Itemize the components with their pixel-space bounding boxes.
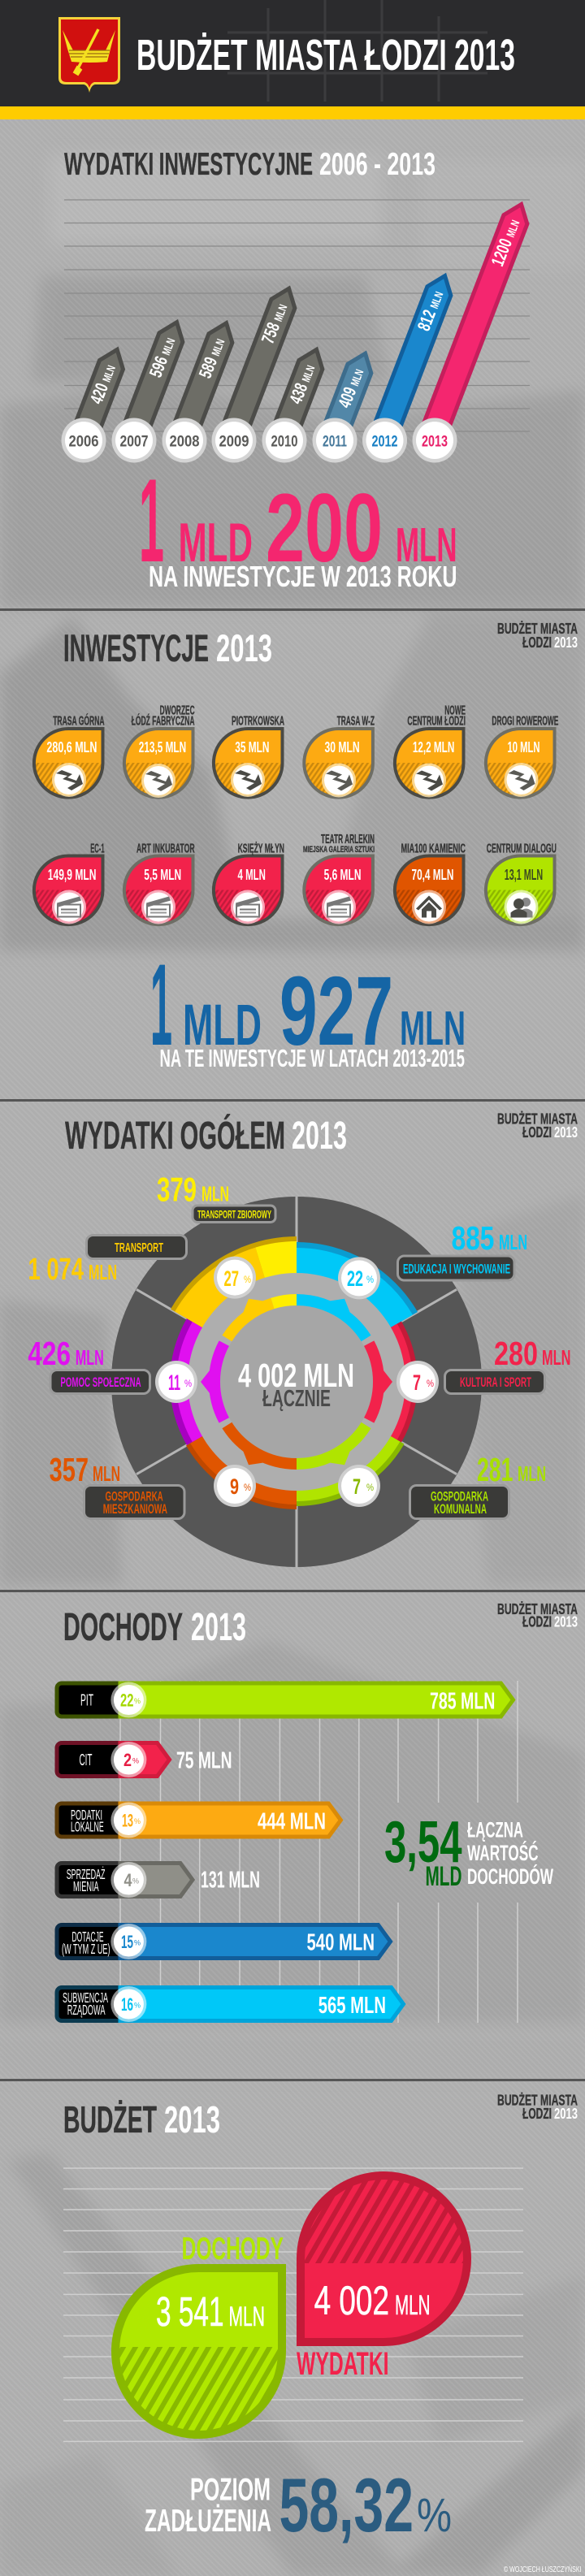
label: transport <box>28 1235 187 1287</box>
callout: poziom zadłużenia 58,32%: ZADŁUŻENIA <box>145 2504 271 2539</box>
percent markers <box>155 1257 439 1507</box>
percent markers: % <box>366 1482 374 1493</box>
year markers: 2012 <box>372 434 398 450</box>
segment: pomoc społeczna <box>170 1318 297 1445</box>
label: gospodarka mieszkaniowa: MIESZKANIOWA <box>103 1502 167 1517</box>
brand tag <box>497 2092 578 2122</box>
drop: wydatki <box>297 2172 467 2382</box>
callout: 3,54 mld total income: 3,54 <box>384 1810 462 1875</box>
heading: wydatki ogółem 2013: 2013 <box>292 1115 347 1158</box>
percent markers: % <box>427 1378 434 1389</box>
badge: Mia100 Kamienic <box>395 842 466 924</box>
badge: Art Inkubator: ART INKUBATOR <box>136 842 195 856</box>
badge: Mia100 Kamienic: 70,4 MLN <box>411 866 453 883</box>
bar: subwencja rządowa: % <box>134 2002 141 2010</box>
header band <box>0 0 585 119</box>
badge: Trasa Górna <box>34 712 105 798</box>
bar: PIT: 785 MLN <box>430 1688 495 1714</box>
brand tag: ŁODZI <box>522 634 552 651</box>
label: transport zbiorowy: 379 <box>157 1170 197 1209</box>
arrow 2009: 758 MLN <box>258 301 291 346</box>
year markers: 2013 <box>422 434 448 450</box>
arrow 2007 <box>124 318 188 433</box>
badge: Trasa W-Z <box>304 714 375 798</box>
badge: Trasa W-Z: 30 MLN <box>324 738 360 755</box>
year markers: 2006 <box>68 434 99 450</box>
badge: Drogi rowerowe <box>486 714 558 798</box>
badge: Drogi rowerowe: 10 MLN <box>507 738 540 755</box>
segment: edukacja <box>297 1242 418 1382</box>
drop: wydatki: MLN <box>395 2290 431 2321</box>
bar: PIT: % <box>134 1697 141 1705</box>
badge: EC-1 <box>34 842 105 924</box>
big number: 1 mld 927 mln <box>150 941 466 1070</box>
label: gospodarka mieszkaniowa: 357 <box>50 1451 89 1488</box>
label: pomoc społeczna: 426 <box>28 1335 71 1372</box>
heading: budżet 2013: BUDŻET <box>63 2098 157 2141</box>
badge: Księży Młyn: 4 MLN <box>237 866 266 883</box>
bar: sprzedaż mienia: % <box>132 1877 139 1885</box>
bar: dotacje: (W TYM Z UE) <box>62 1941 110 1957</box>
bar: PIT: PIT <box>80 1691 93 1709</box>
bar: PIT: 22 <box>120 1690 133 1711</box>
arrow 2006 <box>75 345 129 433</box>
badge: EC-1: 149,9 MLN <box>48 866 96 883</box>
heading: dochody 2013: 2013 <box>191 1606 246 1649</box>
badge: Trasa Górna: 280,6 MLN <box>46 738 97 755</box>
bar: sprzedaż mienia: 4 <box>124 1870 132 1890</box>
heading: dochody 2013: DOCHODY <box>63 1606 183 1649</box>
big number: 1 mld 200 mln: MLD <box>179 512 253 574</box>
percent markers: 7 <box>353 1474 361 1499</box>
label: gospodarka mieszkaniowa: MLN <box>93 1461 120 1486</box>
badge: Dworzec Łódź Fabryczna <box>124 704 195 798</box>
bar: podatki lokalne: 13 <box>122 1810 133 1831</box>
label: edukacja i wychowanie: 885 <box>452 1219 494 1257</box>
segment: mieszkaniowa <box>186 1382 297 1509</box>
percent markers: % <box>366 1274 374 1285</box>
badge: Księży Młyn <box>214 842 284 924</box>
arrow 2011: 409 MLN <box>334 366 367 410</box>
bar: subwencja rządowa: 16 <box>121 1994 133 2015</box>
label: transport zbiorowy: MLN <box>202 1181 229 1206</box>
chart: investment spending arrows 2006-2013 <box>62 200 533 463</box>
arrow 2010 <box>275 345 328 433</box>
badge: Centrum Dialogu <box>486 842 557 924</box>
drop: dochody: DOCHODY <box>182 2232 284 2266</box>
bar: dotacje: % <box>134 1938 141 1946</box>
label: gospodarka komunalna: MLN <box>518 1461 546 1486</box>
big number: 1 mld 927 mln: MLD <box>183 994 262 1058</box>
label: kultura i sport: KULTURA I SPORT <box>460 1375 531 1390</box>
arrow 2009 <box>223 284 301 434</box>
badge: Piotrkowska: PIOTRKOWSKA <box>232 714 284 728</box>
center total: ŁĄCZNIE <box>262 1386 331 1412</box>
bar: subwencja rządowa: 565 MLN <box>318 1993 386 2019</box>
arrow 2010: 438 MLN <box>285 362 318 407</box>
callout: poziom zadłużenia 58,32%: POZIOM <box>190 2473 271 2507</box>
label: gospodarka komunalna: GOSPODARKA <box>431 1490 488 1504</box>
label: gospodarka komunalna: KOMUNALNA <box>434 1502 487 1517</box>
bar: subwencja rządowa: RZĄDOWA <box>67 2002 106 2018</box>
bar: sprzedaż mienia: SPRZEDAŻ <box>67 1866 106 1882</box>
big number: 1 mld 200 mln: 200 <box>266 474 383 582</box>
label: transport zbiorowy: TRANSPORT ZBIOROWY <box>197 1209 271 1220</box>
percent markers: 27 <box>224 1266 239 1291</box>
brand tag: ŁODZI <box>522 1613 552 1630</box>
percent markers: 9 <box>230 1474 239 1499</box>
bar: dotacje: 540 MLN <box>307 1930 375 1956</box>
drop: wydatki: WYDATKI <box>297 2346 388 2382</box>
badge: Centrum Dialogu: 13,1 MLN <box>505 866 543 883</box>
arrow 2013: 1200 MLN <box>487 216 523 269</box>
bar: podatki lokalne: % <box>134 1817 141 1825</box>
chart: spending radial pie <box>111 1197 482 1567</box>
drop: dochody: MLN <box>229 2301 265 2332</box>
bar: podatki lokalne: 444 MLN <box>258 1809 326 1835</box>
badge: Teatr Arlekin / Miejska Galeria Sztuki: 5,6 MLN <box>324 866 361 883</box>
big number: 1 mld 200 mln <box>139 454 457 587</box>
year markers <box>62 418 457 463</box>
label: kultura i sport <box>445 1335 570 1394</box>
badges: investments <box>34 704 558 924</box>
badge: Dworzec Łódź Fabryczna: DWORZEC <box>160 704 195 718</box>
label: gospodarka mieszkaniowa: GOSPODARKA <box>106 1490 163 1504</box>
label: transport: TRANSPORT <box>115 1241 163 1255</box>
badge: Księży Młyn: KSIĘŻY MŁYN <box>238 842 284 856</box>
badge: Dworzec Łódź Fabryczna: ŁÓDŹ FABRYCZNA <box>132 712 195 728</box>
label: gospodarka komunalna <box>410 1451 546 1519</box>
bar: PIT <box>57 1682 514 1717</box>
drop: dochody <box>115 2232 284 2435</box>
inner ring <box>214 1300 379 1464</box>
arrow 2013 <box>423 200 533 433</box>
bar: sprzedaż mienia: MIENIA <box>73 1878 99 1894</box>
badge: Nowe Centrum Łodzi: NOWE <box>444 704 466 718</box>
big number: 1 mld 200 mln: MLN <box>396 518 457 572</box>
label: transport: 1 074 <box>28 1253 84 1287</box>
brand tag <box>497 1110 578 1141</box>
big number: 1 mld 200 mln: 1 <box>139 454 164 587</box>
badge: Nowe Centrum Łodzi <box>395 704 466 798</box>
badge: Nowe Centrum Łodzi: CENTRUM ŁODZI <box>407 714 466 728</box>
percent markers: 11 <box>168 1370 180 1395</box>
badge: Teatr Arlekin / Miejska Galeria Sztuki: TEATR ARLEKIN <box>321 833 375 846</box>
year markers: 2011 <box>323 434 347 450</box>
heading: budżet 2013: 2013 <box>164 2098 220 2141</box>
icon: coat of arms of Łódź <box>58 17 120 93</box>
heading: wydatki inwestycyjne: WYDATKI INWESTYCYJNE <box>64 147 313 182</box>
badge: Trasa W-Z: TRASA W-Z <box>337 714 375 728</box>
year markers: 2007 <box>120 434 148 450</box>
arrow 2008: 589 MLN <box>195 335 228 381</box>
label: gospodarka komunalna: 281 <box>477 1451 513 1488</box>
arrow 2007: 596 MLN <box>145 334 179 380</box>
callout: 3,54 mld total income: MLD <box>426 1861 462 1892</box>
big number: 1 mld 927 mln: MLN <box>400 1002 466 1055</box>
label: kultura i sport: 280 <box>494 1335 538 1372</box>
arrow 2012: 812 MLN <box>414 288 447 334</box>
callout: poziom zadłużenia 58,32%: 58,32 <box>280 2462 414 2548</box>
bar: dotacje: 15 <box>121 1932 133 1952</box>
bar: CIT: % <box>132 1756 139 1764</box>
callout: poziom zadłużenia 58,32% <box>145 2462 452 2548</box>
brand tag: ŁODZI <box>522 2105 552 2122</box>
percent markers: % <box>244 1274 251 1285</box>
badge: Dworzec Łódź Fabryczna: 213,5 MLN <box>139 738 186 755</box>
big number: 1 mld 927 mln: 1 <box>150 941 172 1070</box>
label: pomoc społeczna: POMOC SPOŁECZNA <box>60 1375 141 1390</box>
label: pomoc społeczna: MLN <box>76 1345 104 1370</box>
bar: sprzedaż mienia <box>57 1862 260 1898</box>
bar: CIT <box>57 1742 232 1777</box>
arrow 2012 <box>375 271 457 433</box>
badge: Teatr Arlekin / Miejska Galeria Sztuki: MIEJSKA GALERIA SZTUKI <box>303 845 375 855</box>
bar: CIT: 75 MLN <box>176 1748 232 1774</box>
arrow 2008 <box>174 318 238 433</box>
year markers: 2008 <box>169 434 200 450</box>
segment: komunalna <box>297 1382 405 1506</box>
percent markers: 22 <box>347 1266 363 1291</box>
arrow 2011 <box>325 349 377 433</box>
bar: subwencja rządowa <box>57 1986 403 2022</box>
bar: dotacje <box>57 1924 390 1959</box>
brand tag <box>497 1600 578 1630</box>
bar: CIT: CIT <box>80 1751 93 1769</box>
label: edukacja i wychowanie: MLN <box>499 1230 527 1254</box>
brand tag: ŁODZI <box>522 1123 552 1141</box>
heading: wydatki ogółem 2013: WYDATKI OGÓŁEM <box>65 1113 285 1158</box>
percent markers: % <box>184 1378 192 1389</box>
bar: dotacje: DOTACJE <box>72 1929 104 1945</box>
badge: Nowe Centrum Łodzi: 12,2 MLN <box>413 738 454 755</box>
bar: podatki lokalne: LOKALNE <box>71 1818 104 1834</box>
heading: inwestycje 2013: INWESTYCJE <box>63 626 209 669</box>
year markers: 2010 <box>271 434 297 450</box>
badge: Trasa Górna: TRASA GÓRNA <box>53 712 105 728</box>
caption: na inwestycje w 2013 roku: NA INWESTYCJE W 2013 ROKU <box>149 560 457 593</box>
center total <box>238 1357 354 1412</box>
label: transport: MLN <box>89 1260 117 1284</box>
badge: Art Inkubator <box>124 842 195 924</box>
percent markers: % <box>244 1482 251 1493</box>
badges: investments: EC-1 <box>90 842 105 856</box>
drop: wydatki: 4 002 <box>314 2278 389 2323</box>
badge: Piotrkowska <box>214 714 284 798</box>
center total: 4 002 MLN <box>238 1357 354 1394</box>
bar: subwencja rządowa: SUBWENCJA <box>63 1989 108 2006</box>
label: pomoc społeczna <box>28 1335 150 1394</box>
label: transport zbiorowy <box>157 1170 275 1222</box>
callout: 3,54 mld total income: WARTOŚĆ <box>467 1840 539 1865</box>
arrow 2006: 420 MLN <box>86 362 119 407</box>
bar: sprzedaż mienia: 131 MLN <box>201 1868 260 1894</box>
drop: dochody: 3 541 <box>156 2288 224 2335</box>
badge: Art Inkubator: 5,5 MLN <box>144 866 181 883</box>
chart: income bars <box>57 1681 518 2023</box>
heading: inwestycje 2013: 2013 <box>216 626 272 669</box>
badge: Piotrkowska: 35 MLN <box>235 738 270 755</box>
brand tag <box>497 620 578 651</box>
heading: wydatki inwestycyjne: 2006 - 2013 <box>319 147 436 182</box>
callout: 3,54 mld total income <box>384 1810 553 1892</box>
percent markers: 7 <box>413 1370 421 1395</box>
segment: kultura <box>297 1321 418 1443</box>
callout: poziom zadłużenia 58,32%: % <box>417 2489 452 2542</box>
year markers: 2009 <box>219 434 249 450</box>
callout: 3,54 mld total income: ŁĄCZNA <box>467 1818 523 1842</box>
badge: Teatr Arlekin / Miejska Galeria Sztuki <box>303 833 375 924</box>
bar: podatki lokalne <box>57 1802 340 1838</box>
bar: podatki lokalne: PODATKI <box>71 1807 102 1823</box>
label: edukacja i wychowanie: EDUKACJA I WYCHOWANIE <box>403 1262 510 1277</box>
big number: 1 mld 927 mln: 927 <box>280 955 393 1066</box>
segment: transport <box>171 1236 297 1382</box>
label: edukacja i wychowanie <box>398 1219 527 1280</box>
label: gospodarka mieszkaniowa <box>50 1451 184 1519</box>
badge: Mia100 Kamienic: MIA100 KAMIENIC <box>401 842 466 856</box>
bar: CIT: 2 <box>124 1750 132 1770</box>
